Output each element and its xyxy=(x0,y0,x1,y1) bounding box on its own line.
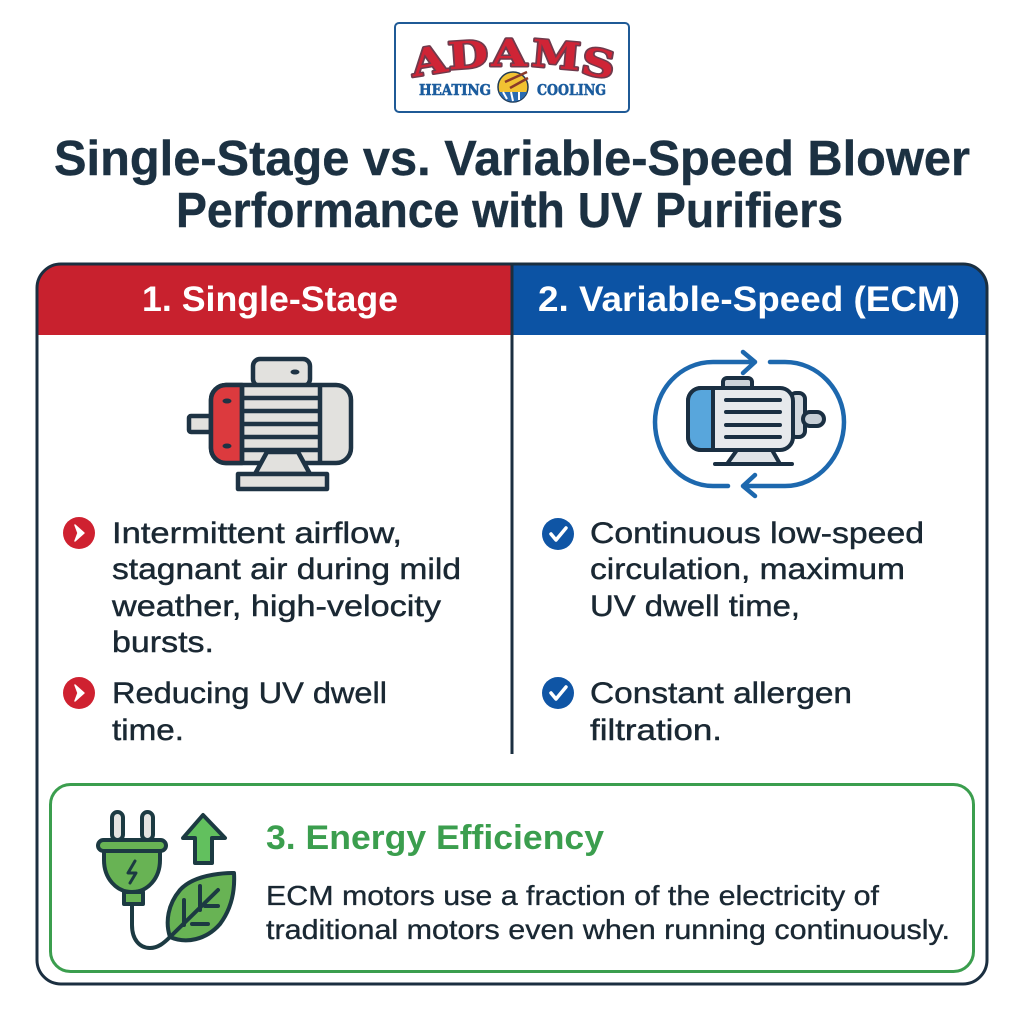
heading: 3. Energy Efficiency: 3. Energy Efficiency xyxy=(266,819,604,857)
title: Performance with UV Purifiers xyxy=(176,184,843,238)
list: variable-speed benefits xyxy=(542,517,924,747)
header: 1. Single-Stage: 1. Single-Stage xyxy=(142,280,398,319)
bullet: red arrow xyxy=(63,677,95,709)
text: ECM motors description xyxy=(266,880,950,945)
logo: Adams Heating & Cooling: A xyxy=(490,31,528,75)
text: reducing UV dwell time: Reducing UV dwell xyxy=(112,677,387,710)
logo: Adams Heating & Cooling: HEATING xyxy=(419,81,491,99)
text: ECM motors description: traditional motors even when running continuously. xyxy=(266,914,950,945)
text: intermittent airflow xyxy=(111,517,461,659)
logo: Adams Heating & Cooling: COOLING xyxy=(537,81,606,99)
logo: Adams Heating & Cooling: D xyxy=(447,32,490,78)
icon: plug, leaf and up arrow xyxy=(98,812,234,948)
logo: Adams Heating & Cooling xyxy=(395,23,629,112)
text: intermittent airflow: stagnant air during mild xyxy=(112,553,461,586)
text: constant allergen filtration: filtration. xyxy=(590,714,722,747)
header: 2. Variable-Speed (ECM) xyxy=(513,264,987,335)
title: Single-Stage vs. Variable-Speed Blower xyxy=(54,132,970,186)
icon: variable-speed motor with circulation arrows xyxy=(655,352,844,496)
text: intermittent airflow: bursts. xyxy=(112,626,214,659)
panel: comparison card xyxy=(37,264,987,984)
bullet: red arrow xyxy=(63,517,95,549)
text: intermittent airflow: Intermittent airflow, xyxy=(112,517,402,550)
panel: energy efficiency xyxy=(50,784,974,972)
bullet: blue check xyxy=(542,677,574,709)
text: intermittent airflow: weather, high-velocity xyxy=(111,590,441,623)
logo: Adams Heating & Cooling: A xyxy=(407,37,452,86)
logo: Adams Heating & Cooling: S xyxy=(578,39,618,88)
text: constant allergen filtration: Constant allergen xyxy=(590,677,852,710)
text: reducing UV dwell time: time. xyxy=(112,714,184,747)
text: continuous circulation: Continuous low-speed xyxy=(590,517,924,550)
text: continuous circulation xyxy=(590,517,924,623)
text: continuous circulation: UV dwell time, xyxy=(590,590,800,623)
logo: Adams Heating & Cooling: M xyxy=(530,31,582,79)
bullet: blue check xyxy=(542,518,574,550)
list: single-stage drawbacks xyxy=(63,517,461,747)
icon: single-stage motor xyxy=(189,359,351,489)
text: constant allergen filtration xyxy=(590,677,852,747)
title xyxy=(54,132,970,238)
text: reducing UV dwell time xyxy=(112,677,387,747)
header: 1. Single-Stage xyxy=(37,264,511,335)
text: ECM motors description: ECM motors use a fraction of the electricity of xyxy=(266,880,879,911)
header: 2. Variable-Speed (ECM): 2. Variable-Speed (ECM) xyxy=(538,280,960,319)
text: continuous circulation: circulation, maximum xyxy=(590,553,905,586)
